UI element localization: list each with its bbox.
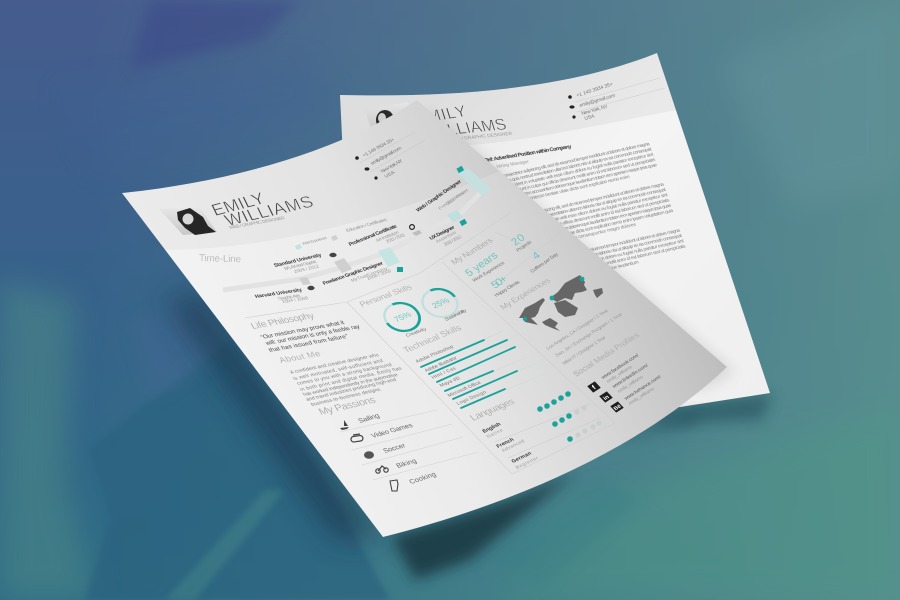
- rear contact details: New York, NY: [581, 104, 609, 117]
- timeline entries: Professional Certificate: [348, 224, 398, 248]
- panel: my numbers: Happy Clients: [493, 279, 522, 298]
- social links: emily_williams: [616, 374, 645, 394]
- timeline entries: [254, 179, 470, 305]
- passion rules: [340, 410, 478, 480]
- about text: comes to you with a strong background: [296, 362, 393, 387]
- letter subject: Hiring Manager: [496, 159, 530, 170]
- letter body: occaecat cupidatat non proident sunt in culpa qui officia deserunt mollit anim id est laborum sed ut perspiciatis: [473, 197, 671, 246]
- timeline entries: Web / Graphic Designer: [415, 179, 463, 213]
- icon: location: [374, 176, 378, 180]
- timeline entries: 2008 / 2009: [366, 268, 393, 282]
- contact details: +1 140 3934 35+: [362, 137, 396, 159]
- social links: www.linkedin.com/: [611, 363, 650, 389]
- icon: video games: [351, 434, 363, 442]
- letter body: occaecat cupidatat non proident sunt in culpa qui officia deserunt mollit anim id est laborum sed ut perspiciatis: [459, 157, 657, 206]
- experience list: Los Angeles, CA / Designer / 1 Year: [545, 308, 610, 351]
- letter body: Lorem ipsum dolor sit amet, consectetur adipiscing elit, sed do eiusmod tempor incididunt ut labore et dolore magna: [468, 182, 665, 230]
- letter body: ab illo inventore veritatis et quasi architecto beatae vitae dicta sunt explicabo nemo enim: [463, 174, 631, 216]
- skill labels: Microsoft Office: [447, 380, 483, 399]
- language rows: German: [510, 451, 533, 465]
- map pins: [523, 277, 584, 321]
- letter body: duis aute irure dolor in reprehenderit in voluptate velit esse cillum dolore eu fugiat nulla pariatur excepteur sint: [457, 152, 655, 200]
- language rows: English: [481, 422, 502, 435]
- letter body: ab illo inventore veritatis et quasi architecto beatae vitae dicta sunt explicabo nemo enim ipsam voluptatem quia: [477, 208, 674, 257]
- rear contact details: USA: [584, 113, 596, 122]
- panel: my passions: [317, 395, 478, 491]
- quote: [259, 320, 362, 354]
- letter body: aliqua ut enim ad minim veniam quis nostrud exercitation ullamco laboris nisi ut aliquip ex ea commodo consequat: [470, 187, 667, 236]
- timeline entries: 2004 / 2009: [281, 296, 310, 305]
- donut: sustainability: 25%: [430, 295, 452, 310]
- panel: my numbers: Projects: [515, 239, 534, 253]
- panel: technical skills: Technical Skills: [401, 323, 464, 355]
- social links: emily_williams: [627, 386, 656, 406]
- panel: my passions: My Passions: [317, 395, 378, 418]
- timeline icons: [307, 166, 467, 290]
- rear page shadow: [650, 393, 772, 424]
- experience list: Sao, Jin / Exchange Program / 1 Year: [554, 312, 624, 358]
- letter body: voluptas sit aspernatur aut odit aut fugit sed quia consequuntur magni dolores: [479, 222, 638, 262]
- experience list: [545, 308, 624, 366]
- timeline entries: Accenture: [435, 230, 458, 244]
- about text: in both print and digital media. Emily has: [299, 366, 403, 393]
- rear header band: [340, 53, 676, 152]
- panel: about me: About Me: [277, 349, 322, 365]
- panel: technical skills: [401, 323, 547, 408]
- legend: [295, 217, 389, 250]
- letter body: Lorem ipsum dolor sit amet, consectetur adipiscing elit, sed do eiusmod tempor incididunt ut labore et dolore magna: [484, 228, 681, 276]
- panel: my experiences: My Experiences: [498, 276, 552, 311]
- front sheet paper: [122, 100, 727, 537]
- timeline entries: MyTrustCompany: [350, 266, 390, 284]
- letter body: duis aute irure dolor in reprehenderit in voluptate velit esse cillum dolore eu fugiat nulla pariatur excepteur sint: [488, 238, 685, 287]
- icon: behance: Bē: [613, 404, 623, 412]
- name: EMILY: [208, 189, 268, 220]
- icon: soccer: [364, 451, 374, 459]
- rear contact details: emily@gmail.com: [579, 93, 616, 109]
- section rules: [245, 213, 615, 474]
- rear name: EMILY: [413, 103, 469, 128]
- timeline heading: Time-Line: [199, 253, 242, 265]
- letter body: unde omnis iste natus error sit voluptatem accusantium doloremque laudantium: [491, 260, 640, 297]
- icon: sailing: [340, 420, 349, 430]
- timeline entries: 2009 / 2012: [293, 264, 321, 275]
- letter body: unde omnis iste natus error sit voluptatem accusantium doloremque laudantium totam rem aperiam eaque ipsa quae: [461, 162, 658, 211]
- timeline entries: 2011 / 2011: [385, 232, 407, 245]
- rear sheet: cover letter: [340, 53, 770, 430]
- legend: Education / Certificates: [345, 217, 389, 234]
- skill labels: Html / Css: [431, 366, 458, 381]
- icon: facebook: f: [591, 384, 598, 391]
- panel: personal skills: [357, 282, 468, 339]
- experience list: Milan IT / Designer 1 Year: [561, 335, 608, 366]
- skill bars: [421, 331, 547, 408]
- panel: my numbers: My Numbers: [449, 236, 495, 266]
- timeline entries: Freelance Graphic Designer: [322, 261, 385, 287]
- panel: my numbers: Coffees per Day: [529, 252, 560, 274]
- panel: my numbers: 4: [530, 250, 543, 262]
- about text: has worked independently in the automotive: [302, 372, 399, 398]
- panel: personal skills: Personal Skills: [357, 282, 414, 309]
- timeline entries: 2011 / 2012: [443, 234, 463, 247]
- timeline entries: FreelanceInc: [437, 190, 467, 211]
- icon: phone: [355, 156, 359, 160]
- panel: my experiences: [498, 275, 624, 366]
- social links: emily_williams: [605, 364, 634, 384]
- rear photo: [365, 102, 420, 132]
- panel: languages: [468, 391, 602, 471]
- panel: my passions: Video Games: [370, 422, 415, 440]
- timeline entries: Standard University: [273, 253, 323, 269]
- social links: www.behance.com/: [623, 374, 663, 401]
- quote: “Our mission may prove what it: [259, 320, 346, 341]
- quote: that has issued from failure”: [267, 333, 350, 354]
- rear contact details: +1 140 3934 35+: [576, 81, 614, 99]
- panel: languages: Languages: [468, 397, 517, 423]
- panel: personal skills: Sustainability: [444, 308, 468, 323]
- timeline entries: Graphic Arts: [277, 293, 302, 302]
- panel: social media profiles: [571, 331, 663, 413]
- contact details: emily@gmail.com: [370, 146, 403, 167]
- language rows: Native: [485, 427, 505, 440]
- social links: www.facebook.com/: [600, 353, 641, 380]
- panel: life philosophy: Life Philosophy: [249, 311, 317, 332]
- language rows: Advanced: [500, 438, 526, 454]
- about text: is well motivated, self-sufficient and: [292, 358, 384, 382]
- panel: my numbers: 20: [509, 232, 528, 248]
- front page shadows: [165, 110, 735, 580]
- about text: [289, 353, 403, 408]
- letter body: aliqua ut enim ad minim veniam quis nostrud exercitation ullamco laboris nisi ut aliquip ex ea commodo consequat: [456, 146, 653, 195]
- rear name: WEB / GRAPHIC DESIGNER: [449, 131, 514, 143]
- panel: about me: [277, 349, 403, 408]
- timeline entries: Harvard University: [254, 288, 304, 300]
- skill labels: Adobe Illustrator: [424, 355, 459, 374]
- panel: my numbers: Work Experience: [471, 260, 506, 283]
- panel: my passions: Sailing: [357, 412, 381, 425]
- social links: [600, 353, 663, 406]
- about text: and travel industries producing high-end: [305, 377, 398, 403]
- legend: Work Experience: [301, 235, 329, 246]
- rear name: WILLIAMS: [425, 116, 509, 141]
- panel: my numbers: 5 years: [463, 250, 501, 279]
- donut: creativity: 75%: [392, 309, 414, 324]
- language rows: French: [495, 437, 515, 450]
- panel: my passions: Soccer: [382, 442, 408, 455]
- letter body: Lorem ipsum dolor sit amet, consectetur adipiscing elit, sed do eiusmod tempor incididunt ut labore et dolore magna: [454, 141, 651, 190]
- rear contact details: [568, 78, 665, 122]
- language rows: Beginner: [514, 455, 540, 471]
- panel: social media profiles: Social Media Profiles: [571, 331, 641, 378]
- rear name: [413, 103, 514, 143]
- skill labels: Maya 4D: [439, 375, 462, 389]
- language dots: [537, 391, 602, 442]
- letter body: [454, 141, 689, 297]
- letter body: occaecat cupidatat non proident sunt in culpa qui officia deserunt mollit anim id est laborum sed ut perspiciatis: [490, 243, 687, 292]
- name: WILLIAMS: [221, 192, 316, 230]
- panel: my passions: Biking: [395, 457, 418, 470]
- contact details: USA: [384, 170, 397, 180]
- job title: WEB / GRAPHIC DESIGNER: [228, 216, 286, 230]
- rear sheet paper: [340, 53, 770, 430]
- panel: my numbers: [449, 232, 560, 298]
- timeline entries: BA, Art and Graphic: [283, 259, 319, 272]
- timeline entries: Art Institution: [375, 230, 401, 244]
- timeline track: [223, 168, 492, 290]
- skill labels: Adobe Photoshop: [415, 344, 455, 365]
- contact details: New York, NY: [380, 158, 405, 175]
- letter subject: Ref: Advertised Position within Company: [484, 144, 572, 164]
- timeline entries: 2012 / Present: [445, 187, 470, 206]
- skill labels: [415, 344, 488, 407]
- photo: [159, 208, 217, 235]
- skill labels: Logo Design: [456, 390, 488, 407]
- world map: [519, 275, 603, 331]
- language rows: [481, 404, 600, 471]
- about text: business-to-business designs.: [310, 387, 383, 408]
- letter body: aliqua ut enim ad minim veniam quis nostrud exercitation ullamco laboris nisi ut aliquip ex ea commodo consequat: [486, 233, 684, 282]
- front header band: [122, 100, 500, 250]
- icon: email: [365, 167, 369, 171]
- panel: life philosophy: [249, 311, 362, 354]
- panel: my passions: Cooking: [408, 471, 438, 486]
- timeline entries: UX Designer: [429, 225, 456, 242]
- letter body: duis aute irure dolor in reprehenderit in voluptate velit esse cillum dolore eu fugiat nulla pariatur excepteur sint: [472, 192, 669, 241]
- panel: personal skills: Creativity: [405, 327, 428, 339]
- icon: linkedin: in: [602, 394, 611, 402]
- panel: my numbers: 50+: [489, 273, 510, 291]
- about text: A confident and creative designer who: [289, 353, 380, 376]
- icon: biking: [376, 466, 388, 473]
- quote: will: our mission is only a feeble ray: [263, 323, 362, 347]
- contact details: [355, 132, 425, 180]
- letter body: unde omnis iste natus error sit voluptatem accusantium doloremque laudantium totam rem aperiam eaque ipsa quae: [475, 203, 673, 251]
- front sheet: resume: [122, 100, 727, 537]
- icon: cooking: [390, 480, 398, 491]
